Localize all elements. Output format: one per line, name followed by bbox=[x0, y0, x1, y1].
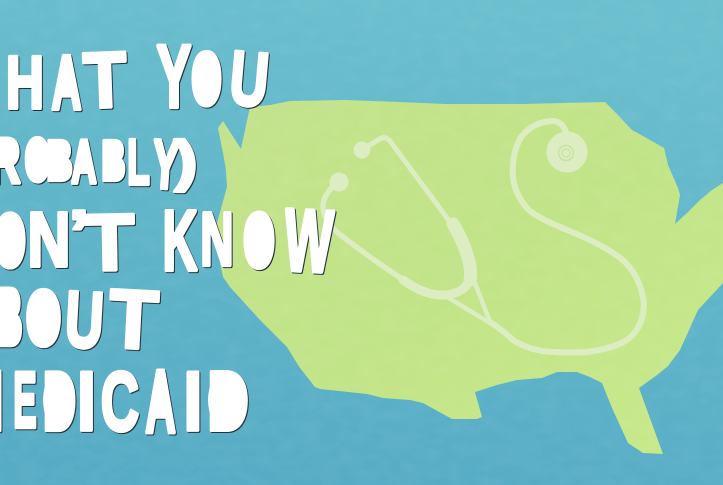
title line: MEDICAID: I bbox=[77, 356, 96, 449]
title line: WHAT YOU: U bbox=[227, 35, 272, 123]
title line: (PROBABLY): Y bbox=[150, 125, 182, 204]
title line: (PROBABLY): ) bbox=[175, 131, 197, 193]
title line: ABOUT: U bbox=[63, 275, 106, 366]
title line: ABOUT: T bbox=[107, 272, 160, 368]
title line: MEDICAID bbox=[0, 352, 249, 451]
title line: WHAT YOU: H bbox=[6, 41, 44, 124]
title line: MEDICAID: E bbox=[13, 356, 37, 444]
title line: DON'T KNOW: N bbox=[201, 198, 233, 282]
title line: MEDICAID: D bbox=[43, 356, 76, 449]
chest piece bbox=[546, 132, 588, 172]
title line: DON'T KNOW: N bbox=[28, 197, 70, 283]
icon: stethoscope bbox=[323, 121, 644, 352]
title line: (PROBABLY): A bbox=[71, 128, 97, 197]
title line: WHAT YOU: Y bbox=[157, 28, 191, 127]
upper ear tube bbox=[362, 138, 450, 222]
title line: WHAT YOU: T bbox=[82, 36, 128, 125]
title line: (PROBABLY): B bbox=[46, 130, 73, 193]
title line: DON'T KNOW: ’ bbox=[69, 198, 89, 269]
title line: MEDICAID: A bbox=[145, 352, 176, 451]
title line: MEDICAID: C bbox=[101, 355, 139, 448]
lower ear tip bbox=[330, 172, 348, 192]
title line: ABOUT: O bbox=[25, 273, 62, 362]
title line: DON'T KNOW: W bbox=[282, 192, 335, 292]
title line: DON'T KNOW: K bbox=[163, 192, 197, 289]
title line: DON'T KNOW: T bbox=[84, 198, 135, 288]
title line: DON'T KNOW bbox=[0, 192, 335, 292]
title line: MEDICAID: D bbox=[207, 354, 249, 449]
title line: (PROBABLY): B bbox=[101, 129, 126, 192]
title line: DON'T KNOW: O bbox=[243, 198, 275, 284]
title line: MEDICAID: I bbox=[184, 356, 202, 449]
title: What You (Probably) Don't Know About Medicaid bbox=[0, 28, 335, 451]
title line: (PROBABLY): L bbox=[127, 128, 150, 199]
upper ear tip bbox=[354, 142, 370, 158]
lower ear tube bbox=[323, 182, 402, 279]
map of the United States bbox=[217, 100, 723, 454]
main tube bbox=[490, 121, 644, 352]
title line: WHAT YOU: O bbox=[191, 36, 222, 121]
title line: ABOUT bbox=[0, 268, 160, 368]
triangular yoke bbox=[447, 270, 490, 323]
title line: (PROBABLY) bbox=[0, 123, 197, 204]
binaural curve bbox=[403, 278, 470, 295]
title line: WHAT YOU bbox=[0, 28, 272, 127]
title line: WHAT YOU: A bbox=[51, 41, 82, 126]
title line: (PROBABLY): O bbox=[24, 128, 51, 195]
thick binaural section bbox=[453, 224, 471, 280]
chest piece rings bbox=[558, 146, 574, 160]
